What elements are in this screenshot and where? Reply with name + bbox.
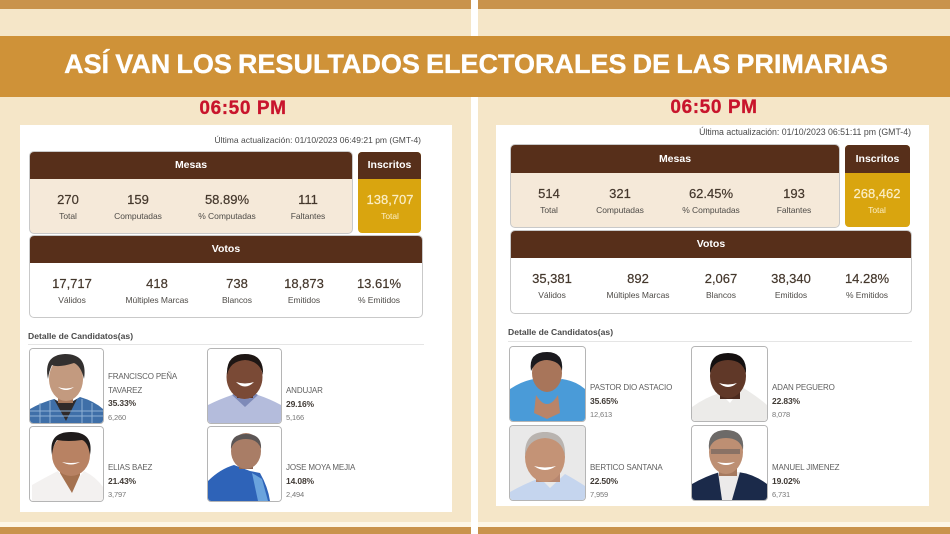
photo: Francisco Peña Tavarez <box>30 349 103 423</box>
photo: Andujar <box>208 349 281 423</box>
candidate text: BERTICO SANTANA <box>590 463 663 472</box>
stat: total: 514 <box>538 186 560 201</box>
candidate text: ADAN PEGUERO <box>772 383 835 392</box>
top bar right <box>478 0 950 9</box>
inscritos heading: Inscritos <box>856 153 899 165</box>
candidate text: 29.16% <box>286 399 314 409</box>
candidate: Jose Moya Mejia <box>207 426 356 502</box>
candidate text <box>286 386 323 422</box>
candidate text: PASTOR DIO ASTACIO <box>590 383 672 392</box>
stat: percent computadas <box>682 186 740 215</box>
stat: validos: Válidos <box>58 295 86 305</box>
candidate text <box>590 383 672 419</box>
photo: Manuel Jimenez <box>692 426 767 500</box>
candidate text: 5,166 <box>286 413 304 422</box>
stat: percent computadas: 62.45% <box>689 186 733 201</box>
stat: emitidos: 38,340 <box>771 271 811 286</box>
photo: Adan Peguero <box>692 347 767 421</box>
stat: percent emitidos: % Emitidos <box>846 290 888 300</box>
stat: percent emitidos: 14.28% <box>845 271 889 286</box>
candidate text: 22.83% <box>772 396 800 406</box>
last update text: Última actualización: 01/10/2023 06:51:11 pm (GMT-4) <box>699 127 911 137</box>
candidates heading: Detalle de Candidatos(as) <box>28 331 133 341</box>
stat: computadas: Computadas <box>596 205 644 215</box>
votos heading <box>511 231 911 258</box>
stat: blancos: 738 <box>226 276 248 291</box>
candidate text: 6,731 <box>772 490 790 499</box>
candidate text: ELIAS BAEZ <box>108 463 152 472</box>
stat: computadas <box>114 192 162 221</box>
stat: emitidos: Emitidos <box>775 290 807 300</box>
panel: mesas <box>511 145 839 227</box>
votos heading: Votos <box>212 243 240 255</box>
last update text: Última actualización: 01/10/2023 06:49:21 pm (GMT-4) <box>215 135 421 145</box>
stat: multiples marcas: Múltiples Marcas <box>126 295 188 305</box>
stat: faltantes: Faltantes <box>777 205 811 215</box>
time stamp left: 06:50 PM <box>199 98 287 119</box>
candidate text: 7,959 <box>590 490 608 499</box>
candidate text: 8,078 <box>772 410 790 419</box>
candidate text <box>772 463 840 499</box>
mesas heading: Mesas <box>659 153 691 165</box>
stat: faltantes <box>777 186 811 215</box>
mesas heading <box>30 152 352 179</box>
candidate: Francisco Peña Tavarez <box>29 348 178 424</box>
candidate text: 2,494 <box>286 490 304 499</box>
stat: inscritos total: Total <box>868 205 886 215</box>
stat: emitidos: Emitidos <box>288 295 320 305</box>
candidate: Elias Baez <box>29 426 152 502</box>
right column background <box>478 0 950 534</box>
stat: computadas: Computadas <box>114 211 162 221</box>
candidate: Adan Peguero <box>691 346 835 422</box>
stat: percent emitidos <box>845 271 889 300</box>
panel: mesas <box>30 152 352 233</box>
stat: inscritos total <box>854 186 900 215</box>
stat: faltantes: Faltantes <box>291 211 325 221</box>
panel: votos <box>511 231 911 313</box>
photo: Pastor Dio Astacio <box>510 347 585 421</box>
candidate text: ANDUJAR <box>286 386 323 395</box>
inscritos heading <box>845 145 910 173</box>
candidate text <box>286 463 356 499</box>
stat: percent computadas <box>198 192 256 221</box>
candidate text: 6,260 <box>108 413 126 422</box>
stat: computadas: 159 <box>127 192 149 207</box>
candidate: Pastor Dio Astacio <box>509 346 672 422</box>
stat: computadas <box>596 186 644 215</box>
photo: Jose Moya Mejia <box>208 427 281 501</box>
candidate text <box>772 383 835 419</box>
stat: percent emitidos: % Emitidos <box>358 295 400 305</box>
candidate text: 14.08% <box>286 476 314 486</box>
stat: multiples marcas <box>607 271 670 300</box>
candidate text: 19.02% <box>772 476 800 486</box>
title banner: ASÍ VAN LOS RESULTADOS ELECTORALES DE LAS PRIMARIAS <box>64 49 888 79</box>
stat: faltantes: 111 <box>298 192 318 207</box>
stat: validos <box>532 271 572 300</box>
candidate text <box>108 463 152 499</box>
candidate: Manuel Jimenez <box>691 425 840 501</box>
stat: multiples marcas: 892 <box>627 271 649 286</box>
candidates heading: Detalle de Candidatos(as) <box>508 327 613 337</box>
candidate text: 21.43% <box>108 476 136 486</box>
title banner <box>0 36 950 97</box>
stat: percent computadas: % Computadas <box>682 205 740 215</box>
bottom bar left <box>0 527 471 534</box>
inscritos heading: Inscritos <box>368 159 411 171</box>
stat: validos: 35,381 <box>532 271 572 286</box>
panel: left results <box>20 125 452 512</box>
photo: Bertico Santana <box>510 426 585 500</box>
panel: votos <box>30 236 422 317</box>
panel: inscritos <box>358 152 421 233</box>
candidate text: 22.50% <box>590 476 618 486</box>
stat: blancos: Blancos <box>706 290 736 300</box>
panel: right results <box>496 125 929 506</box>
stat: inscritos total <box>366 192 414 221</box>
candidate text <box>590 463 663 499</box>
stat: percent emitidos <box>357 276 401 305</box>
panel: inscritos <box>845 145 910 227</box>
time stamp right: 06:50 PM <box>670 97 758 118</box>
stat: multiples marcas <box>126 276 188 305</box>
left column background <box>0 0 471 534</box>
stat: blancos: Blancos <box>222 295 252 305</box>
stat: percent computadas: 58.89% <box>205 192 249 207</box>
stat: blancos: 2,067 <box>705 271 737 286</box>
candidate text: FRANCISCO PEÑA <box>108 372 177 381</box>
stat: total: 270 <box>57 192 79 207</box>
stat: validos <box>52 276 92 305</box>
stat: percent emitidos: 13.61% <box>357 276 401 291</box>
candidate text: MANUEL JIMENEZ <box>772 463 839 472</box>
stat: emitidos <box>284 276 324 305</box>
candidate text <box>108 372 178 422</box>
stat: total <box>57 192 79 221</box>
stat: computadas: 321 <box>609 186 631 201</box>
stat: emitidos <box>771 271 811 300</box>
stat: inscritos total: 268,462 <box>854 186 900 201</box>
candidate text: 35.65% <box>590 396 618 406</box>
votos heading <box>30 236 422 263</box>
stat: blancos <box>705 271 737 300</box>
stat: validos: Válidos <box>538 290 566 300</box>
candidate: Andujar <box>207 348 323 424</box>
bottom bar right <box>478 527 950 534</box>
candidate text: 35.33% <box>108 398 136 408</box>
stat: total: Total <box>59 211 77 221</box>
stat: validos: 17,717 <box>52 276 92 291</box>
mesas heading <box>511 145 839 173</box>
votos heading: Votos <box>697 238 725 250</box>
candidate: Bertico Santana <box>509 425 663 501</box>
stat: multiples marcas: 418 <box>146 276 168 291</box>
stat: emitidos: 18,873 <box>284 276 324 291</box>
candidate text: TAVAREZ <box>108 386 142 395</box>
candidate text: 3,797 <box>108 490 126 499</box>
stat: inscritos total: 138,707 <box>366 192 414 207</box>
stat: inscritos total: Total <box>381 211 399 221</box>
photo: Elias Baez <box>30 427 103 501</box>
top bar left <box>0 0 471 9</box>
candidate text: JOSE MOYA MEJIA <box>286 463 355 472</box>
stat: faltantes <box>291 192 325 221</box>
stat: total <box>538 186 560 215</box>
stat: percent computadas: % Computadas <box>198 211 256 221</box>
stat: total: Total <box>540 205 558 215</box>
mesas heading: Mesas <box>175 159 207 171</box>
stat: faltantes: 193 <box>783 186 805 201</box>
stat: multiples marcas: Múltiples Marcas <box>607 290 669 300</box>
candidate text: 12,613 <box>590 410 612 419</box>
inscritos heading <box>358 152 421 179</box>
stat: blancos <box>222 276 252 305</box>
